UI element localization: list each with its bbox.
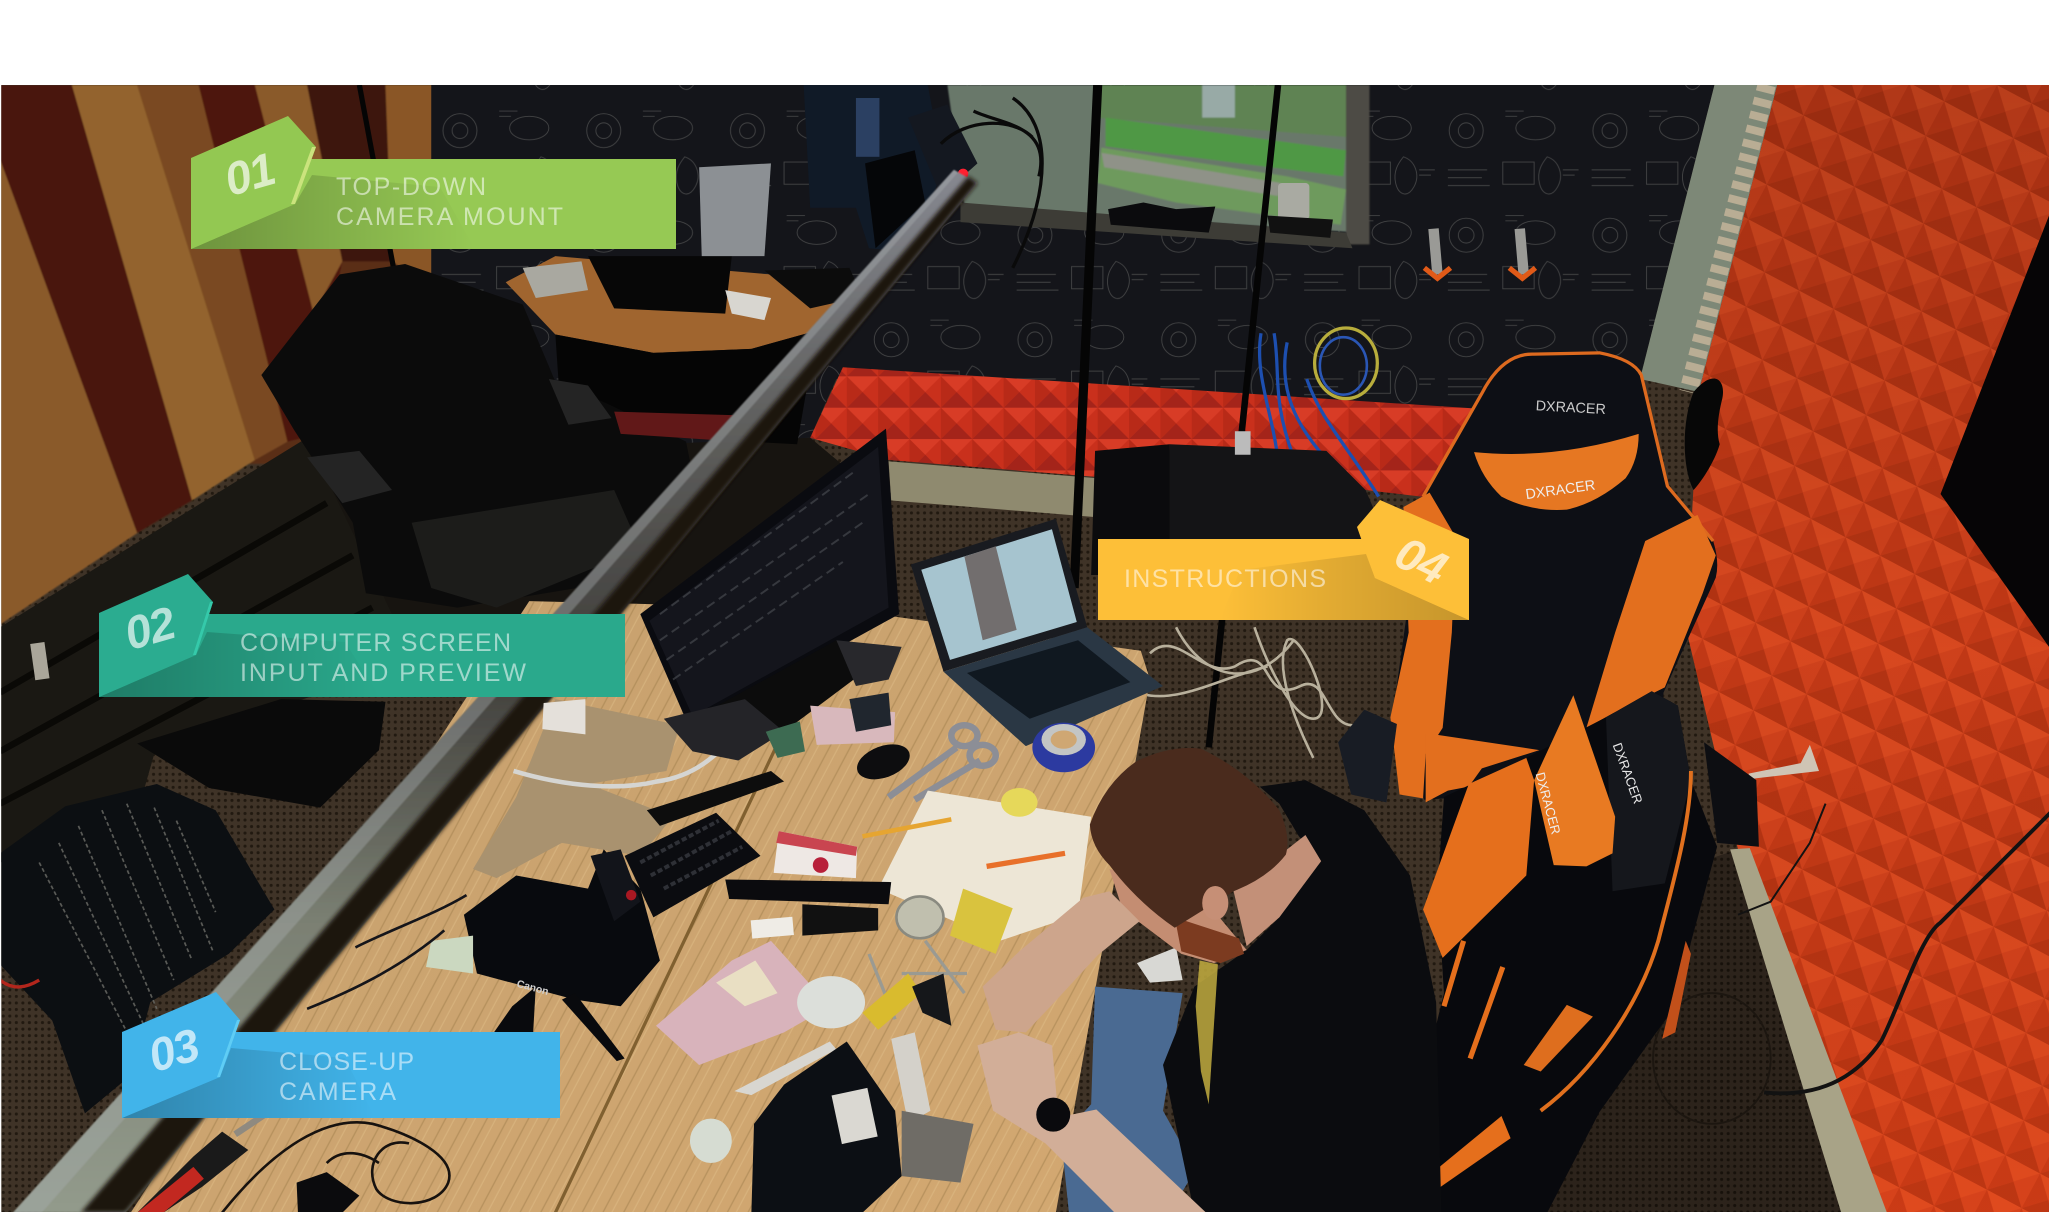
back wall with chalk patent drawings bbox=[431, 85, 1714, 444]
number tag bbox=[122, 992, 240, 1118]
number: 04 bbox=[1387, 526, 1455, 595]
barcode label bbox=[751, 917, 794, 939]
anti-static bubble wrap bbox=[656, 941, 830, 1065]
gaming chair, rear backrest bbox=[1390, 353, 1717, 802]
label: COMPUTER SCREEN bbox=[240, 629, 511, 657]
window with garden view bbox=[947, 85, 1369, 244]
black visitor chair bbox=[0, 784, 274, 1113]
black lamp on bench bbox=[751, 1032, 974, 1212]
tag edge bbox=[217, 1020, 240, 1077]
jeans bbox=[1061, 987, 1196, 1212]
tool hooks and ethernet cables bbox=[1260, 229, 1535, 497]
red foam strip on back wall bbox=[810, 367, 1483, 503]
upper arm and hand bbox=[983, 891, 1139, 1032]
floor baseboard bbox=[1730, 848, 1887, 1212]
pliers bbox=[647, 771, 784, 826]
desk seam bbox=[554, 748, 775, 1212]
yellow PCB bbox=[950, 889, 1013, 954]
striped left wall bbox=[0, 85, 444, 625]
shirt print bbox=[1196, 960, 1218, 1104]
label: TOP-DOWN bbox=[336, 173, 486, 201]
gaming chair, rear backrest: DXRACER bbox=[1535, 398, 1606, 418]
hair bbox=[1090, 748, 1287, 928]
red floor cable bbox=[1, 978, 40, 989]
top-down camera bbox=[804, 85, 1042, 268]
tag edge bbox=[291, 147, 316, 204]
orange acoustic foam right wall bbox=[1686, 85, 2049, 1212]
number: 03 bbox=[143, 1018, 206, 1082]
label: INPUT AND PREVIEW bbox=[240, 659, 526, 687]
scissors bbox=[889, 725, 996, 800]
lower arm and hand bbox=[977, 1032, 1206, 1212]
fold shadow bbox=[191, 175, 475, 249]
wires on the wall bbox=[1653, 804, 2049, 1124]
Adafruit box bbox=[802, 904, 878, 936]
banner bar bbox=[122, 1032, 560, 1118]
cardboard sheet bbox=[473, 699, 680, 878]
chair left armrest bbox=[1338, 710, 1397, 802]
face bbox=[1109, 869, 1247, 963]
paper card bbox=[716, 960, 778, 1006]
silver field monitor bbox=[699, 163, 771, 256]
floor cables bbox=[1137, 627, 1352, 758]
clear solder spool bbox=[797, 976, 865, 1028]
number tag bbox=[99, 574, 213, 697]
right wall trim bbox=[1640, 85, 1777, 392]
tag edge bbox=[193, 602, 213, 655]
solder roll bbox=[690, 1119, 732, 1163]
magnifier bbox=[896, 896, 943, 938]
banner bar bbox=[191, 159, 676, 249]
soldering iron bbox=[137, 1095, 294, 1212]
label: CAMERA bbox=[279, 1078, 396, 1106]
banner 03: close-up camera bbox=[122, 992, 560, 1118]
dark floor behind black chair bbox=[332, 438, 840, 614]
watch bbox=[1036, 1098, 1070, 1132]
banner bar bbox=[99, 614, 625, 697]
light stands bbox=[359, 85, 1278, 747]
banner 02: computer screen input and preview bbox=[99, 574, 625, 697]
computer tower bbox=[137, 699, 385, 808]
work desk bbox=[131, 601, 1150, 1212]
paper sheet with pencil and marker bbox=[862, 788, 1091, 941]
baseboard bbox=[889, 461, 1100, 517]
dark acoustic panel on lower-left wall bbox=[0, 438, 392, 862]
neck bbox=[1234, 835, 1321, 946]
wall-mounted TV bbox=[1941, 216, 2049, 647]
shaded carpet near the wall bbox=[1548, 852, 1841, 1212]
gaming chair, front seat: DXRACER bbox=[1533, 770, 1564, 836]
fold shadow bbox=[99, 632, 380, 697]
black office chair with jacket bbox=[261, 264, 745, 608]
fold shadow bbox=[122, 1048, 375, 1118]
banner bar bbox=[1098, 539, 1469, 620]
circuit boards, white box and small parts near the monitor bbox=[542, 640, 902, 761]
camera cables bbox=[307, 895, 467, 1009]
ear bbox=[1202, 886, 1228, 920]
window sill with controllers and jar bbox=[960, 183, 1352, 248]
banner 04: instructions bbox=[1098, 500, 1469, 620]
blue painter's tape roll bbox=[1032, 723, 1095, 772]
power cable and adapter bbox=[222, 1122, 449, 1212]
Raspberry Pi box bbox=[774, 831, 857, 878]
gaming chair, rear backrest: DXRACER bbox=[1525, 478, 1596, 503]
label: CAMERA MOUNT bbox=[336, 203, 563, 231]
helping-hands tool bbox=[862, 941, 967, 1030]
computer mouse bbox=[852, 738, 915, 786]
number tag bbox=[1357, 500, 1469, 620]
gaming chair, front seat: DXRACER bbox=[1610, 741, 1646, 806]
pole-mounted top-down arm bbox=[13, 170, 977, 1212]
black keyboard bbox=[625, 813, 761, 917]
computer monitor bbox=[640, 429, 899, 751]
t-shirt bbox=[1163, 780, 1441, 1212]
remote control bbox=[725, 879, 891, 904]
number: 01 bbox=[219, 142, 280, 206]
wooden round table bbox=[506, 256, 862, 444]
locking pliers bbox=[734, 1041, 836, 1095]
banner 01: top-down camera mount bbox=[191, 116, 676, 249]
laptop bbox=[911, 519, 1163, 746]
wood grain bbox=[131, 601, 1150, 1212]
fold shadow bbox=[1220, 554, 1469, 620]
man soldering bbox=[977, 748, 1441, 1212]
wall plug bbox=[1748, 745, 1819, 779]
chair wing shadow on wall bbox=[1685, 379, 1723, 490]
beard bbox=[1175, 917, 1244, 963]
label: CLOSE-UP bbox=[279, 1048, 414, 1076]
gaming chair, front seat bbox=[1384, 691, 1759, 1212]
white cable bbox=[513, 755, 717, 789]
number: 02 bbox=[119, 596, 182, 660]
label: INSTRUCTIONS bbox=[1124, 565, 1326, 593]
video camera on tripod bbox=[426, 849, 660, 1061]
power strip bbox=[1137, 947, 1183, 983]
video camera on tripod: Canon bbox=[515, 979, 550, 998]
equipment cases bbox=[1091, 431, 1385, 575]
number tag bbox=[191, 116, 316, 249]
